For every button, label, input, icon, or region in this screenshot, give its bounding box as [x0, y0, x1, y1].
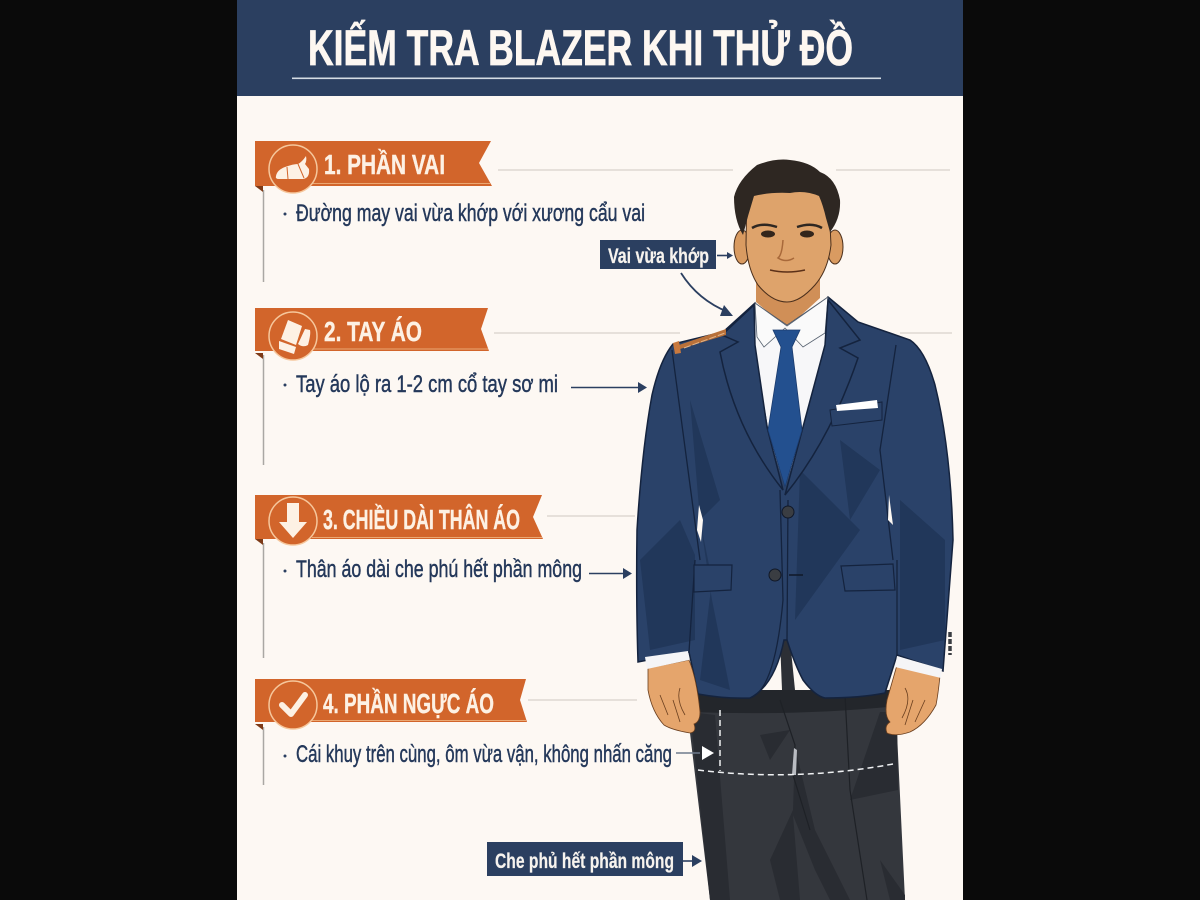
hands: [648, 660, 940, 735]
header band: [237, 0, 963, 96]
neck: [756, 270, 820, 328]
lapels: [720, 305, 783, 490]
heading: 4. PHẦN NGỰC ÁO: [323, 688, 494, 719]
pocket square: [836, 400, 878, 411]
connector lines: [494, 170, 952, 700]
shirt cuffs: [645, 651, 689, 669]
section 1: shoulder: [255, 141, 645, 282]
collar: [755, 297, 828, 347]
ribbon: [255, 141, 492, 186]
heading: 2. TAY ÁO: [324, 316, 422, 347]
section 3: length: [255, 495, 632, 658]
figure: man in blazer: [637, 160, 953, 900]
heading: 3. CHIỀU DÀI THÂN ÁO: [323, 504, 520, 535]
callout: che phủ hết phần mông: Che phủ hết phần mông: [495, 850, 674, 873]
hair: [734, 160, 840, 235]
text: length: Thân áo dài che phú hết phần mông: [296, 556, 582, 583]
page panel: [237, 0, 963, 900]
text: shoulder: Đường may vai vừa khớp với xương cẩu vai: [296, 200, 645, 227]
section 2: sleeve: [255, 308, 647, 465]
jacket shading: [640, 400, 945, 690]
callout: vai vừa khớp: Vai vừa khớp: [608, 245, 709, 268]
icon: cuff: [279, 320, 310, 354]
title: KIẾM TRA BLAZER KHI THỬ ĐỒ: [308, 19, 853, 76]
heading: 1. PHẦN VAI: [324, 149, 445, 180]
flap pockets: [694, 564, 895, 592]
ribbon: [255, 308, 489, 351]
text: chest: Cái khuy trên cùng, ôm vừa vận, không nhấn căng: [296, 741, 672, 768]
nose and mouth: [778, 240, 794, 260]
pocket: [830, 402, 882, 426]
curved arrow: [681, 273, 733, 316]
jacket: [637, 297, 953, 698]
dashed hip guide: [698, 710, 893, 775]
ribbon: [255, 495, 543, 539]
sleeve buttons: [948, 632, 952, 655]
icon: shoulder: [276, 156, 309, 179]
arm gaps: [697, 495, 893, 542]
tie: [768, 330, 802, 487]
arrow: [571, 386, 640, 388]
buttons: [782, 506, 794, 518]
head: [734, 160, 843, 302]
arrow: white to hip: [676, 746, 714, 760]
text: sleeve: Tay áo lộ ra 1-2 cm cổ tay sơ mi: [296, 371, 558, 398]
icon: check: [282, 695, 305, 714]
brows and eyes: [752, 225, 822, 228]
arrow: [589, 572, 625, 574]
ribbon: [255, 679, 527, 722]
shoulder seam highlight: [673, 329, 726, 354]
trousers: [690, 640, 905, 900]
icon: down arrow: [279, 503, 307, 538]
callout: che phủ hết phần mông: [487, 842, 702, 876]
section 4: chest: [255, 679, 672, 785]
shirt front: [755, 297, 828, 488]
